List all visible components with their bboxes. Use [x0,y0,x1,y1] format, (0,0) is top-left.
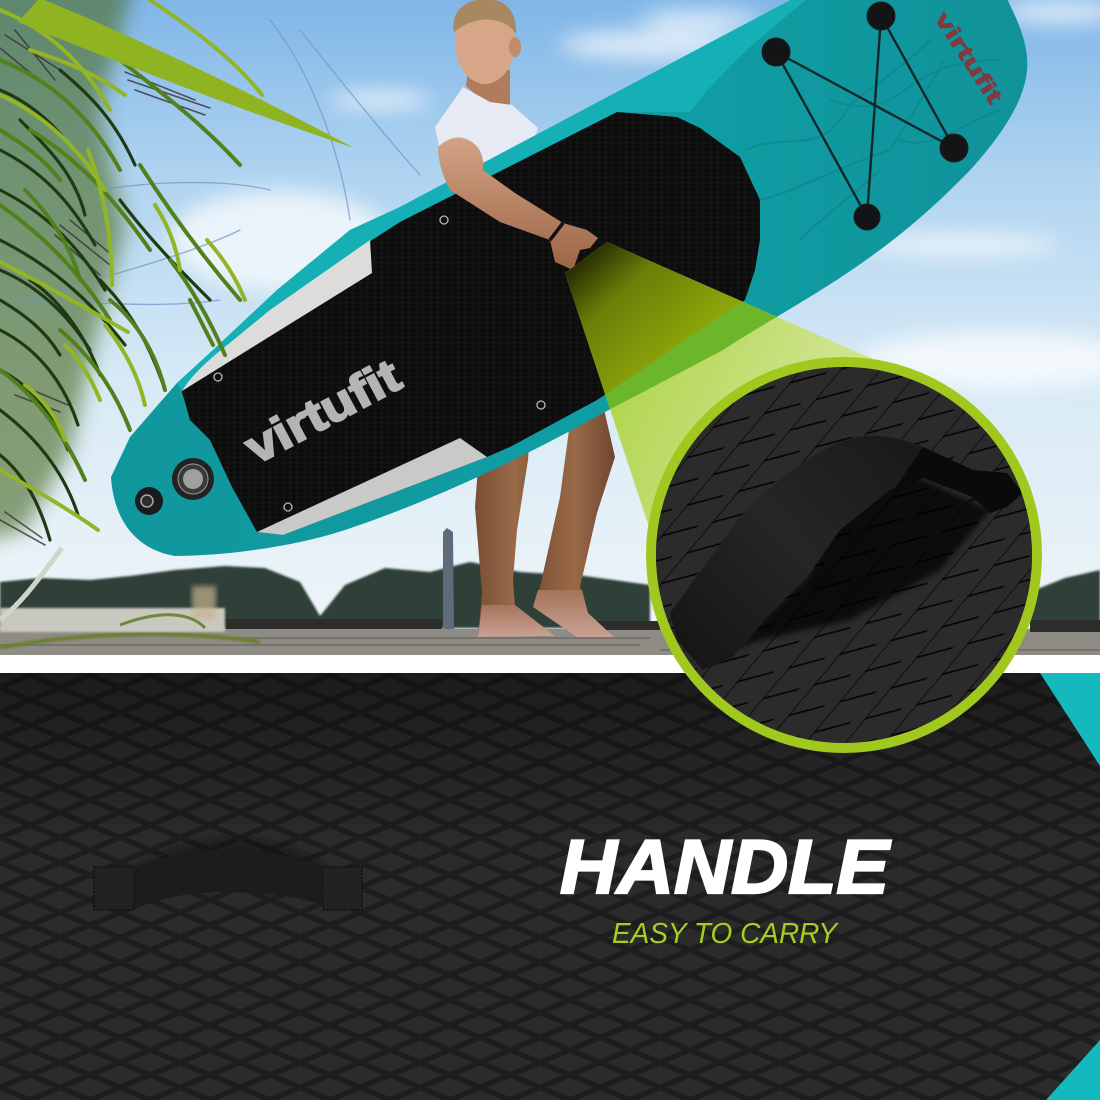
teal corner top [1040,673,1100,766]
fin mount [135,487,163,515]
strap [133,850,323,908]
beam over leg [565,242,875,600]
strap shadow [733,470,990,650]
paddle board [111,0,1027,556]
man: arm over board [438,137,598,270]
white divider strip [0,655,1100,673]
pad logo: virtufit [236,348,409,474]
valve [172,458,214,500]
handle on pad [94,838,362,910]
distant post [443,528,454,630]
sky [0,0,1100,640]
foliage left [0,0,420,550]
man: right leg [533,400,615,637]
beam over sky [565,242,875,600]
top shading [0,673,1100,1100]
bungee anchors [762,2,968,230]
subheading: EASY TO CARRY [612,918,840,950]
diamond texture background [0,673,1100,1100]
bright green blades [0,0,262,530]
teal corner bottom [1046,1040,1100,1100]
treeline [0,562,1100,628]
beam over black pad [565,242,875,600]
brand on nose: virtufit [930,7,1008,109]
man: shirt [435,87,538,163]
man: head [455,20,515,84]
pale thin stems [20,20,420,304]
lime highlight beam [565,242,875,600]
dark blades [0,70,210,540]
long bright blade [18,0,354,148]
deck pad [182,112,760,535]
strap end [895,447,1023,513]
lens content [640,350,1050,760]
clouds [170,0,1100,388]
dock streaks [0,638,1100,650]
white stripe lower [257,438,487,535]
heading: HANDLE [560,825,891,910]
man: left leg [475,452,555,637]
lens ring [651,362,1037,748]
right foot [533,590,614,637]
man: wrist band [550,223,563,240]
stitched tabs [94,867,362,910]
handle shadow [135,838,330,880]
bright upper rim [177,0,812,392]
dock [0,629,1100,655]
bottom panel: textured pad [0,673,1100,1100]
man: hair [453,0,516,34]
bungee cords [782,28,948,206]
photo panel: man carrying paddle board [0,0,1100,655]
magnified lens: handle close-up [640,350,1050,760]
mid green blades [0,20,240,480]
deck water print [745,40,1000,240]
white stripe upper [182,240,372,391]
dock bars [225,619,1100,632]
left foot [478,605,555,637]
feather tufts [0,30,210,545]
beam over teal board [565,242,875,600]
man: ear [509,37,521,57]
blurred tan post [192,586,216,620]
man: neck [466,70,510,108]
D-rings [214,216,545,511]
strap [670,436,1023,670]
foreground grass on dock [0,548,260,648]
foliage mass [0,0,140,550]
dock left edge [0,608,225,632]
board shell [111,0,1027,556]
lens texture [640,350,1050,760]
